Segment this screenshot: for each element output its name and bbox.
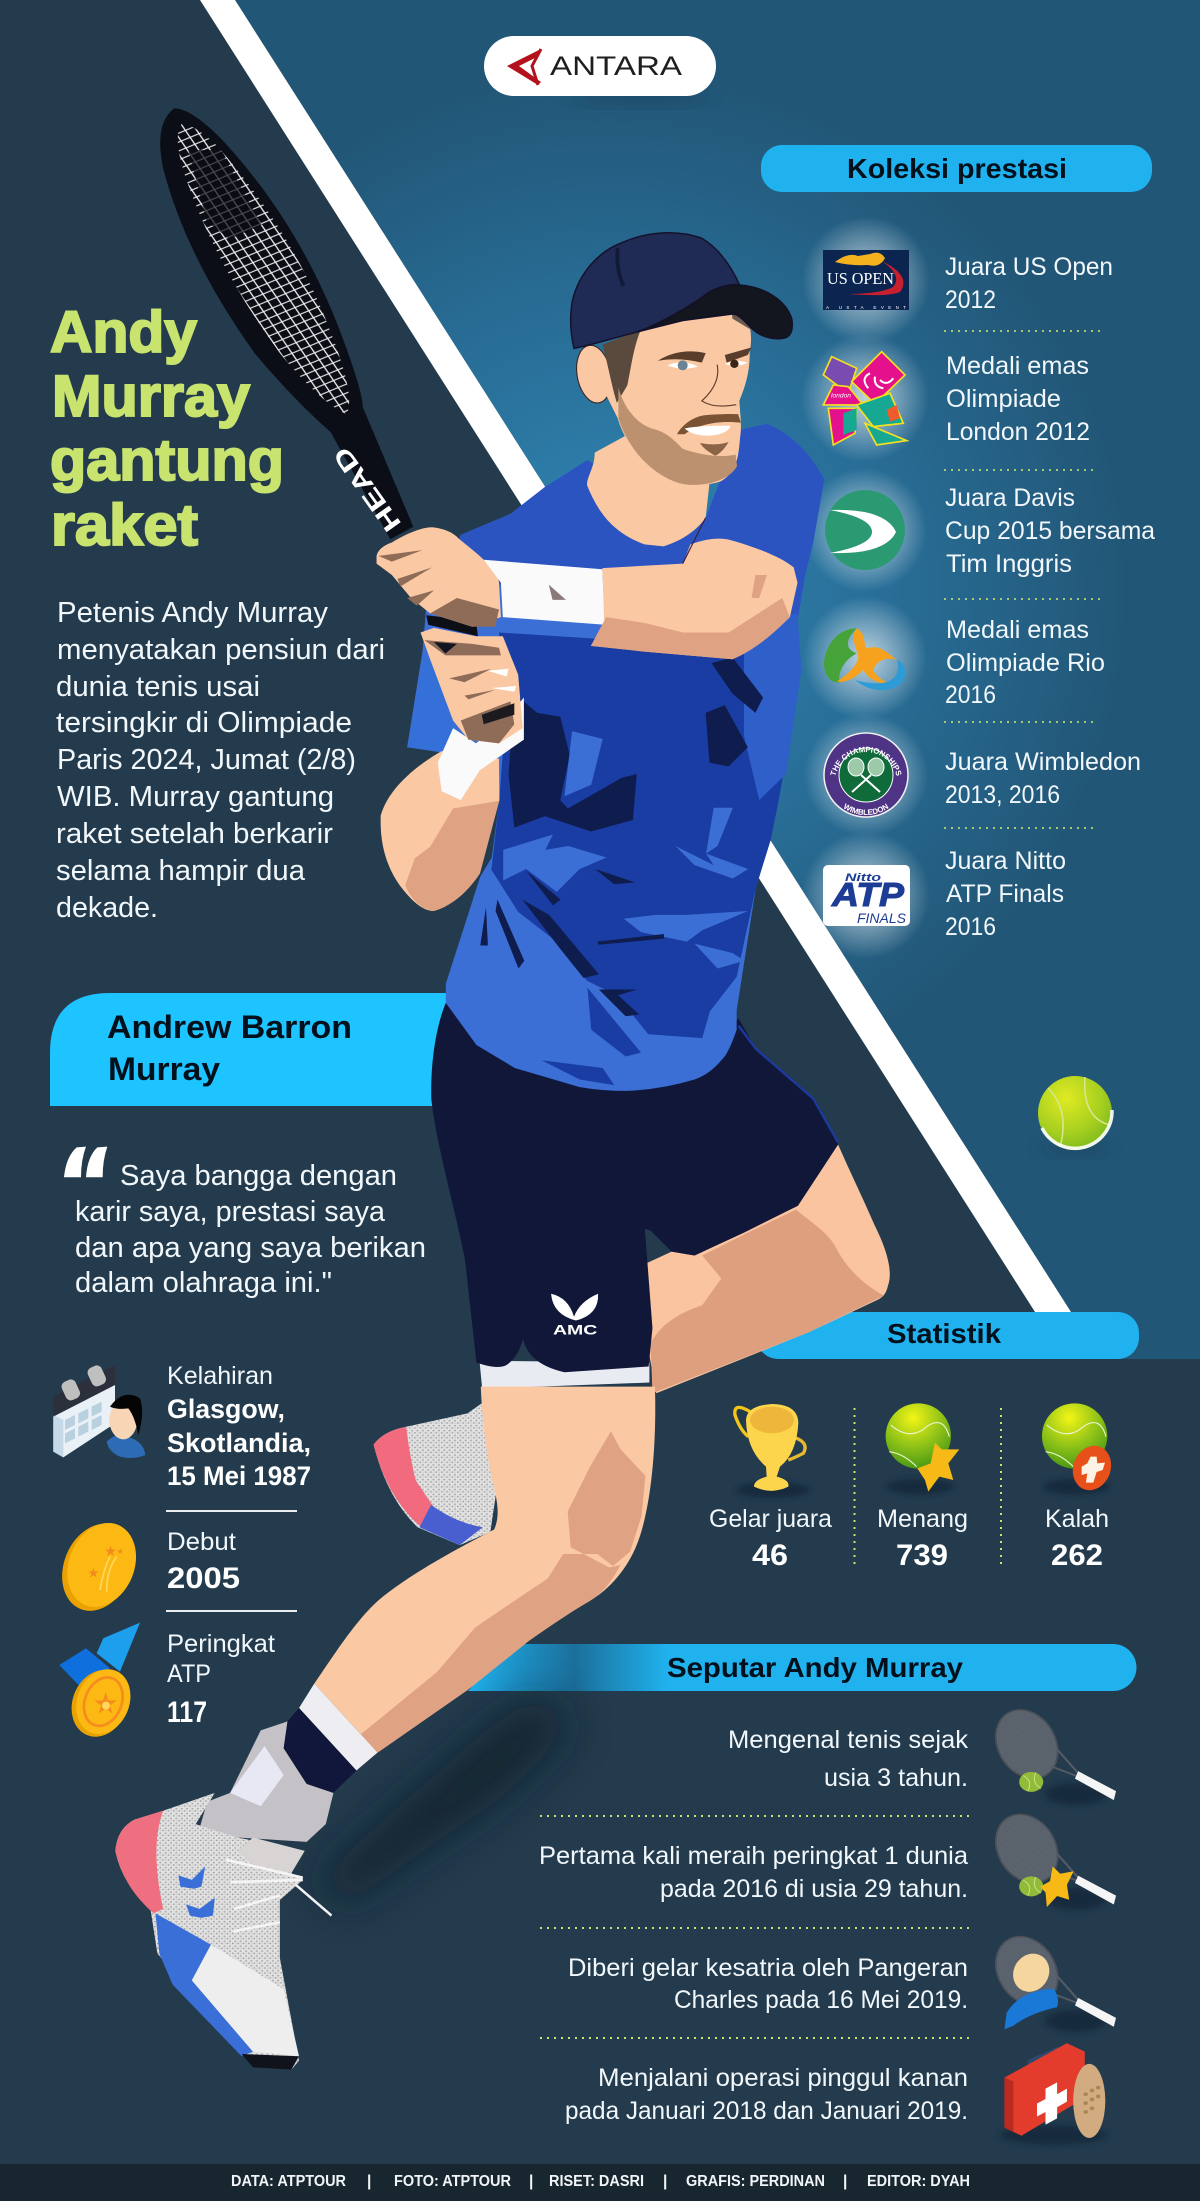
shorts brand (551, 1294, 598, 1337)
list: achievements (944, 253, 1155, 941)
top hand (377, 527, 605, 636)
list: facts: Diberi gelar kesatria oleh Pangeran (568, 1954, 968, 1982)
panel: koleksi prestasi (761, 145, 1155, 956)
footer: credits: | (663, 2173, 667, 2190)
list: facts: pada 2016 di usia 29 tahun. (660, 1875, 968, 1903)
logo: Wimbledon: THE CHAMPIONSHIPS (830, 746, 902, 776)
panel: biodata: 117 (167, 1696, 207, 1729)
footer: credits: EDITOR: DYAH (867, 2173, 970, 2190)
panel: statistik: 46 (752, 1539, 788, 1572)
lower hand (421, 628, 523, 743)
logo: London 2012 paralympic (823, 352, 907, 445)
logo: Wimbledon (823, 732, 909, 818)
background: blue court panel (235, 0, 1200, 1359)
text block: intro paragraph: Petenis Andy Murray (57, 597, 329, 629)
logo: Wimbledon: WIMBLEDON (844, 803, 889, 815)
logo: Nitto ATP Finals (823, 865, 910, 926)
name banner: Andrew Barron Murray (50, 993, 470, 1106)
moustache (677, 414, 741, 434)
footer: credits: DATA: ATPTOUR (231, 2173, 346, 2190)
list: achievements: Medali emas (946, 352, 1089, 380)
shirt shadows (509, 657, 763, 831)
footer: credits: FOTO: ATPTOUR (394, 2173, 511, 2190)
panel: statistik: Gelar juara (709, 1505, 832, 1533)
lower forearm (381, 698, 524, 911)
icon: medal (59, 1623, 140, 1745)
sock (299, 1683, 377, 1771)
footer: credits: RISET: DASRI (549, 2173, 644, 2190)
front leg (314, 1387, 655, 1753)
list: achievements: Tim Inggris (946, 550, 1072, 578)
panel: statistik (709, 1312, 1139, 1572)
list: facts: Mengenal tenis sejak (728, 1726, 968, 1754)
list: facts: Pertama kali meraih peringkat 1 dunia (539, 1842, 968, 1870)
logo: London 2012 paralympic: london (831, 392, 851, 399)
icon: racket and ball (986, 1703, 1116, 1805)
text block: intro paragraph: selama hampir dua (56, 855, 305, 887)
logo: US Open: US OPEN (827, 269, 894, 288)
title (50, 300, 284, 558)
heading pill: statistik: Statistik (887, 1318, 1001, 1349)
heading pill: statistik (757, 1312, 1139, 1359)
panel: biodata: Peringkat (167, 1630, 275, 1658)
panel: statistik: Kalah (1045, 1505, 1109, 1533)
footer: credits: | (843, 2173, 847, 2190)
footer: credits: | (529, 2173, 533, 2190)
list: achievements: Juara Nitto (945, 847, 1066, 875)
white court line (200, 0, 1071, 1312)
brows and eyes (658, 351, 706, 363)
footer: credits (0, 2164, 1200, 2201)
logo glows (801, 216, 930, 959)
tennis racket (160, 108, 413, 539)
heading pill: seputar: Seputar Andy Murray (667, 1652, 963, 1683)
figure shadow (315, 1695, 575, 1905)
legs and upper body (407, 424, 890, 1393)
logo: ANTARA (484, 36, 716, 104)
goatee (700, 442, 729, 456)
list: achievements: Medali emas (946, 616, 1089, 644)
text block: intro paragraph: Paris 2024, Jumat (2/8) (57, 744, 356, 776)
heading pill: seputar (468, 1644, 1136, 1691)
list: achievements: Olimpiade (946, 385, 1061, 413)
list: achievements: London 2012 (946, 418, 1090, 446)
icon: quotation mark (64, 1147, 107, 1177)
cap (571, 233, 792, 348)
list: achievements: 2016 (945, 913, 996, 941)
icon: gold coin: ★ (117, 1547, 124, 1556)
name banner: Andrew Barron Murray: Murray (108, 1051, 220, 1087)
heading pill: koleksi prestasi (761, 145, 1152, 192)
icon: tennis ball (1038, 1076, 1112, 1154)
neck (587, 430, 709, 546)
list: facts (539, 1726, 970, 2125)
mouth (685, 426, 731, 436)
panel: biodata: Glasgow, (167, 1394, 285, 1424)
arms and head (377, 233, 798, 911)
quote: dalam olahraga ini." (75, 1267, 332, 1299)
panel: statistik: 739 (896, 1539, 948, 1572)
icon: calendar with person (53, 1364, 145, 1458)
front leg shadow (360, 1431, 645, 1753)
racket brand text: HEAD (328, 441, 407, 537)
quote (64, 1147, 426, 1299)
quote: dan apa yang saya berikan (75, 1232, 426, 1264)
icon: tennis ball with cross (1042, 1403, 1117, 1496)
logo: Nitto ATP Finals: ATP (831, 876, 905, 913)
list: achievements: 2016 (945, 681, 996, 709)
icon: first aid kit and bandage (1000, 2043, 1107, 2145)
list: achievements: 2012 (945, 286, 996, 314)
panel: biodata: Debut (167, 1528, 236, 1556)
panel: biodata: ATP (167, 1660, 211, 1688)
icon: racket, ball and star (986, 1808, 1116, 1910)
back shoe (374, 1400, 498, 1545)
icon: gold coin (50, 1513, 148, 1622)
list: achievements: 2013, 2016 (945, 781, 1060, 809)
text block: intro paragraph: dekade. (56, 892, 158, 924)
list: facts: usia 3 tahun. (824, 1764, 968, 1792)
face (572, 303, 752, 485)
upper forearm (591, 518, 798, 659)
shorts (431, 1003, 838, 1372)
list: facts: pada Januari 2018 dan Januari 2019. (565, 2097, 968, 2125)
panel: biodata: Kelahiran (167, 1362, 273, 1390)
beard (618, 388, 737, 485)
panel: biodata: 15 Mei 1987 (167, 1461, 311, 1491)
text block: intro paragraph: raket setelah berkarir (56, 818, 334, 850)
panel: biodata (50, 1362, 311, 1745)
logo: Nitto ATP Finals: FINALS (857, 910, 907, 926)
logo: Rio 2016 (824, 628, 905, 690)
logo: US Open: A USTA EVENT (826, 305, 906, 310)
list: achievements: ATP Finals (946, 880, 1064, 908)
list: achievements: Juara Wimbledon (945, 748, 1141, 776)
list: achievements: Olimpiade Rio (946, 649, 1105, 677)
icon: tennis ball with star (886, 1403, 959, 1495)
icon: medal: ★ (92, 1687, 119, 1720)
text block: intro paragraph: WIB. Murray gantung (57, 781, 334, 813)
title: Murray (52, 364, 250, 429)
panel: statistik: 262 (1051, 1539, 1103, 1572)
list: achievements: Cup 2015 bersama (945, 517, 1155, 545)
icon: racket and person (986, 1930, 1116, 2032)
text block: intro paragraph (56, 597, 385, 924)
logo: US Open (823, 250, 909, 310)
ankle and front shoe (115, 1683, 377, 2070)
front shoe (115, 1793, 332, 2070)
list: facts: Menjalani operasi pinggul kanan (598, 2064, 968, 2092)
illustration: Andy Murray (115, 108, 890, 2070)
quote: karir saya, prestasi saya (75, 1196, 385, 1228)
shorts brand: AMC (553, 1322, 597, 1337)
ankle brace (200, 1721, 333, 1842)
shirt light patches (503, 731, 748, 968)
title: raket (51, 493, 198, 558)
list: facts: Charles pada 16 Mei 2019. (674, 1986, 968, 2014)
icon: gold coin: ★ (87, 1565, 99, 1580)
logo: ANTARA: ANTARA (550, 51, 682, 81)
panel: biodata: Skotlandia, (167, 1428, 311, 1458)
hair (602, 330, 641, 403)
list: achievements: Juara US Open (945, 253, 1113, 281)
text block: intro paragraph: menyatakan pensiun dari (57, 634, 385, 666)
footer: credits: GRAFIS: PERDINAN (686, 2173, 825, 2190)
logo: Davis Cup (825, 490, 905, 570)
panel: statistik: Menang (877, 1505, 968, 1533)
list: achievements: Juara Davis (945, 484, 1075, 512)
shirt (407, 424, 824, 1091)
icon: trophy (735, 1404, 810, 1498)
text block: intro paragraph: dunia tenis usai (56, 671, 260, 703)
wristband (484, 560, 605, 625)
back leg (647, 1145, 890, 1393)
heading pill: koleksi prestasi: Koleksi prestasi (847, 153, 1067, 184)
text block: intro paragraph: tersingkir di Olimpiade (56, 707, 352, 739)
icon: gold coin: ★ (104, 1544, 117, 1560)
panel: seputar Andy Murray (468, 1644, 1136, 2145)
title: Andy (50, 300, 197, 365)
panel: biodata: 2005 (167, 1562, 240, 1595)
logo: Nitto ATP Finals: Nitto (845, 872, 881, 884)
quote: Saya bangga dengan (120, 1160, 397, 1192)
footer: credits: | (367, 2173, 371, 2190)
white compression band (479, 1361, 649, 1389)
name banner: Andrew Barron Murray: Andrew Barron (107, 1009, 352, 1045)
title: gantung (50, 428, 284, 493)
